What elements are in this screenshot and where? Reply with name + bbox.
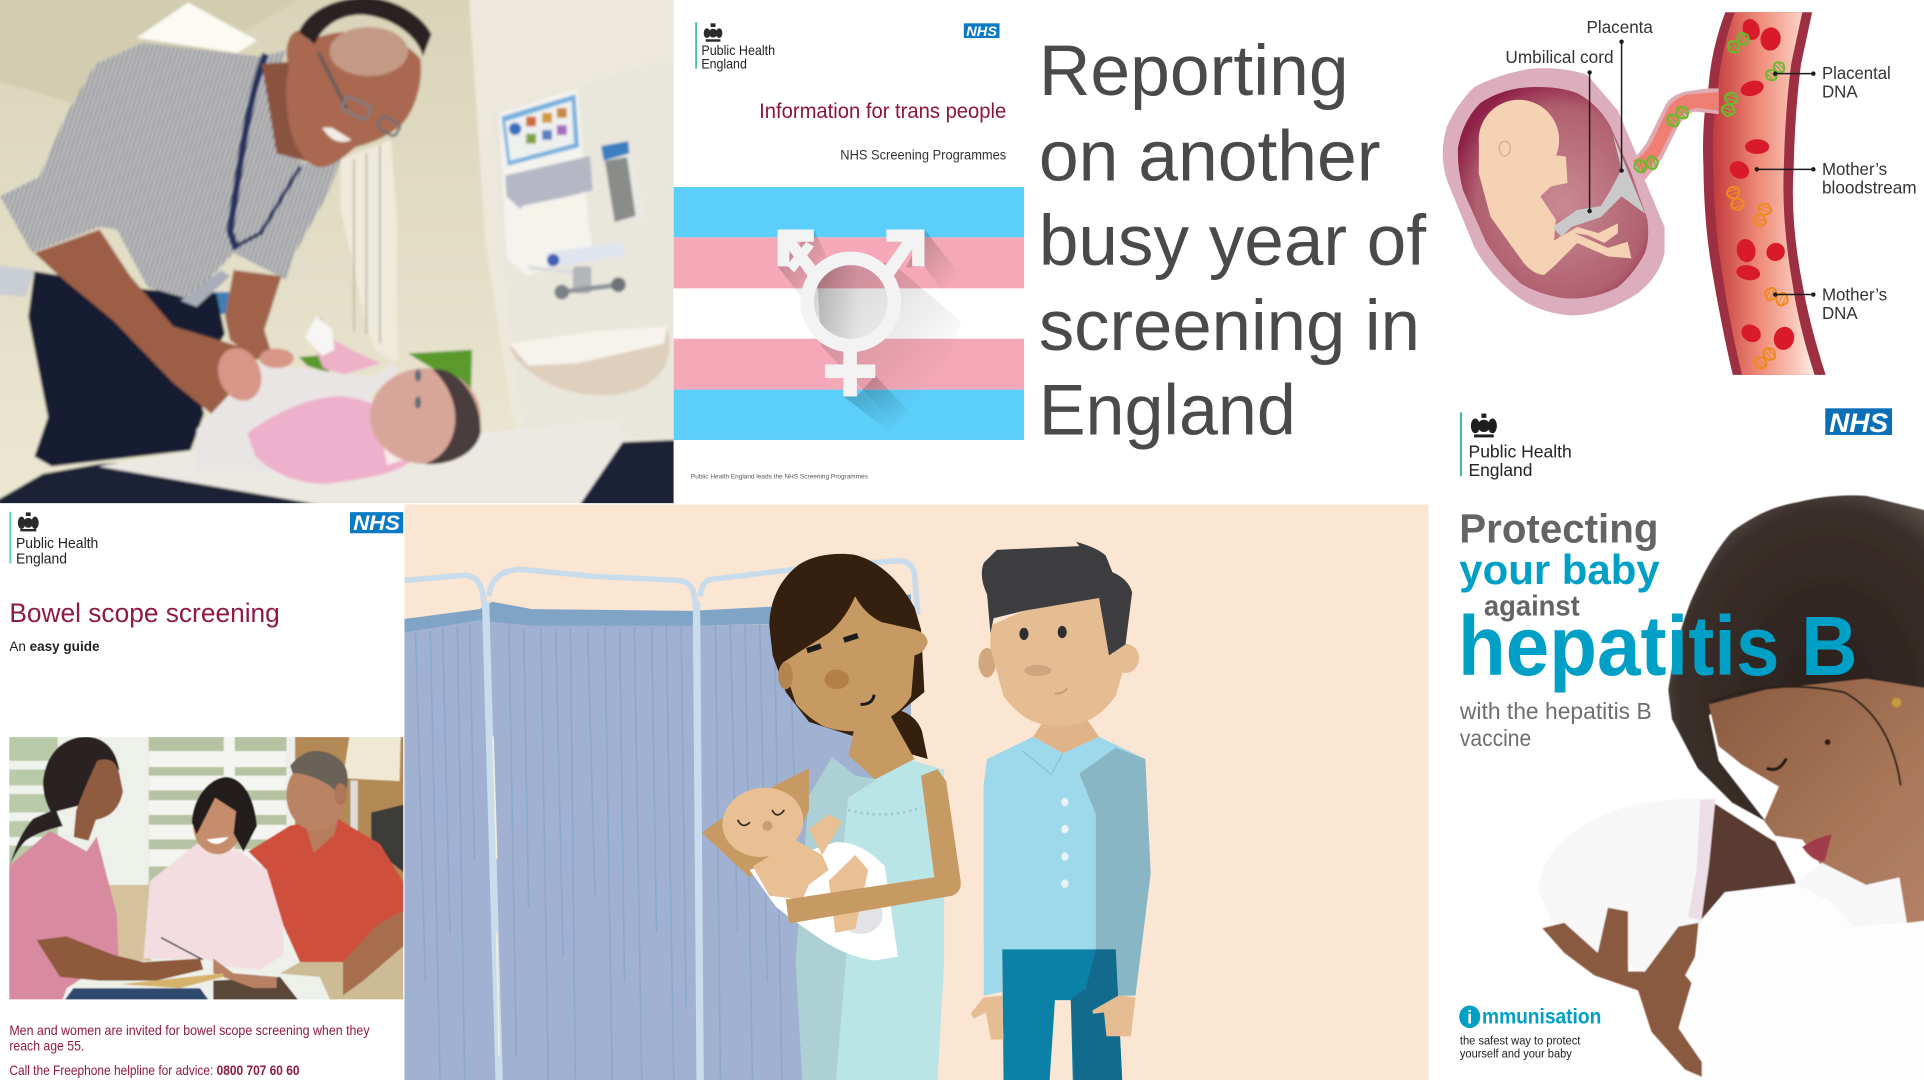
logo: Public Health England: Public Health — [701, 43, 775, 58]
leaflet: information for trans people — [674, 0, 1024, 503]
leader lines — [1587, 40, 1816, 297]
logo: Public Health England — [1460, 412, 1572, 480]
diagram labels: DNA — [1822, 82, 1858, 102]
curtain — [341, 140, 397, 362]
cover title: Protecting — [1459, 505, 1658, 551]
seated man — [248, 751, 412, 1006]
mother's hand — [1542, 908, 1702, 1077]
leaflet: protecting your baby against hepatitis B — [1458, 408, 1924, 1080]
umbilical cord and placenta — [1553, 135, 1645, 237]
diagram labels: Placental — [1822, 63, 1891, 83]
NHS logo: NHS — [966, 23, 998, 39]
curtain — [403, 561, 918, 1080]
mother's hair — [1668, 495, 1924, 821]
father — [971, 542, 1151, 1080]
logo: Public Health England: England — [16, 552, 67, 568]
leaflet: bowel scope screening — [0, 504, 412, 1080]
eligibility note: Men and women are invited for bowel scope screening when they — [9, 1023, 370, 1038]
cover subtitle: vaccine — [1460, 725, 1531, 751]
logo: Public Health England — [695, 22, 775, 72]
immunisation strapline — [1460, 1034, 1581, 1060]
DNA fragments: mother's (orange) — [1725, 185, 1790, 372]
chairs — [299, 350, 472, 396]
baby — [195, 317, 481, 484]
seated woman — [120, 777, 303, 1006]
diagram labels: Mother’s — [1822, 285, 1887, 305]
mother's hair — [769, 554, 928, 759]
diagram labels — [1505, 17, 1917, 323]
tap and sink — [509, 242, 669, 395]
fetus — [1479, 100, 1631, 275]
baby — [717, 781, 883, 934]
diagram labels: Umbilical cord — [1505, 47, 1614, 67]
main title: England — [1039, 372, 1296, 450]
logo: Public Health England: Public Health — [16, 536, 98, 552]
mother's neck and face — [778, 596, 928, 779]
photo: nurse with couple on sofa — [0, 730, 412, 1006]
hand-wash poster and dispenser — [499, 88, 593, 276]
immunisation strapline: yourself and your baby — [1460, 1047, 1572, 1060]
newborn's knitted hat — [1556, 800, 1700, 972]
cover subtitle — [1459, 698, 1652, 751]
cover title: against — [1484, 589, 1580, 621]
logo: Public Health England: Public Health — [1469, 441, 1572, 461]
paper sheet — [98, 430, 624, 504]
diagram labels: Placenta — [1587, 17, 1653, 37]
mother's near arm — [786, 769, 961, 924]
cover subtitle: with the hepatitis B — [1459, 698, 1652, 724]
leaflet heading: Bowel scope screening — [9, 598, 280, 628]
mother's dress — [796, 757, 944, 1080]
diagram labels: DNA — [1822, 303, 1858, 323]
mother's face — [1709, 679, 1924, 923]
man's arms — [34, 230, 282, 415]
main title: Reporting — [1039, 32, 1349, 111]
diagram labels: bloodstream — [1822, 177, 1917, 197]
leaflet footer: Public Health England leads the NHS Screening Programmes — [691, 474, 868, 481]
NHS logo: NHS — [353, 512, 400, 535]
soap dispenser — [600, 140, 637, 223]
main title: busy year of — [1039, 202, 1426, 281]
womb — [1443, 68, 1665, 315]
man's head, hair and glasses — [262, 0, 432, 167]
leaflet heading: Information for trans people — [759, 100, 1006, 123]
cover title: your baby — [1459, 546, 1660, 593]
transgender symbol with long shadows — [778, 230, 961, 432]
main title: screening in — [1039, 287, 1420, 366]
logo: Public Health England — [9, 512, 98, 568]
blanket — [750, 842, 898, 960]
blood vessel — [1623, 12, 1826, 375]
illustration: couple with newborn by hospital curtain — [403, 504, 1429, 1080]
diagram labels: Mother’s — [1822, 159, 1887, 179]
examination couch — [0, 438, 674, 504]
cover title — [1458, 505, 1858, 693]
photo: mother and newborn — [1537, 495, 1924, 1080]
photo: clinician examining a baby — [0, 0, 688, 515]
main title — [1039, 32, 1426, 450]
lanyard — [230, 54, 300, 249]
trans flag stripes — [674, 187, 1024, 440]
leaflet subheading: An easy guide — [9, 639, 100, 654]
red blood cells — [1726, 17, 1797, 352]
eligibility note — [9, 1023, 370, 1054]
immunisation logo: mmunisation — [1482, 1006, 1601, 1029]
newborn's face — [1701, 804, 1796, 919]
freephone helpline: Call the Freephone helpline for advice: 0800 707 60 60 — [9, 1063, 299, 1078]
man's trousers — [28, 271, 225, 466]
eligibility note: reach age 55. — [9, 1039, 84, 1054]
logo: Public Health England: England — [1469, 460, 1532, 480]
mother's far arm — [702, 768, 809, 877]
newborn's white cardigan — [1683, 882, 1796, 1077]
immunisation strapline: the safest way to protect — [1460, 1034, 1581, 1047]
man's striped shirt — [0, 43, 341, 299]
nurse — [0, 736, 213, 1006]
main title: on another — [1039, 117, 1381, 196]
NHS logo: NHS — [1829, 408, 1888, 438]
leaflet subheading: NHS Screening Programmes — [840, 148, 1006, 163]
immunisation logo: i — [1467, 1007, 1472, 1028]
DNA fragments: placental (green) — [1633, 30, 1787, 174]
logo: Public Health England: England — [701, 57, 747, 72]
diagram: placental DNA in mother's bloodstream — [1443, 12, 1917, 375]
cover title: hepatitis B — [1458, 598, 1858, 693]
